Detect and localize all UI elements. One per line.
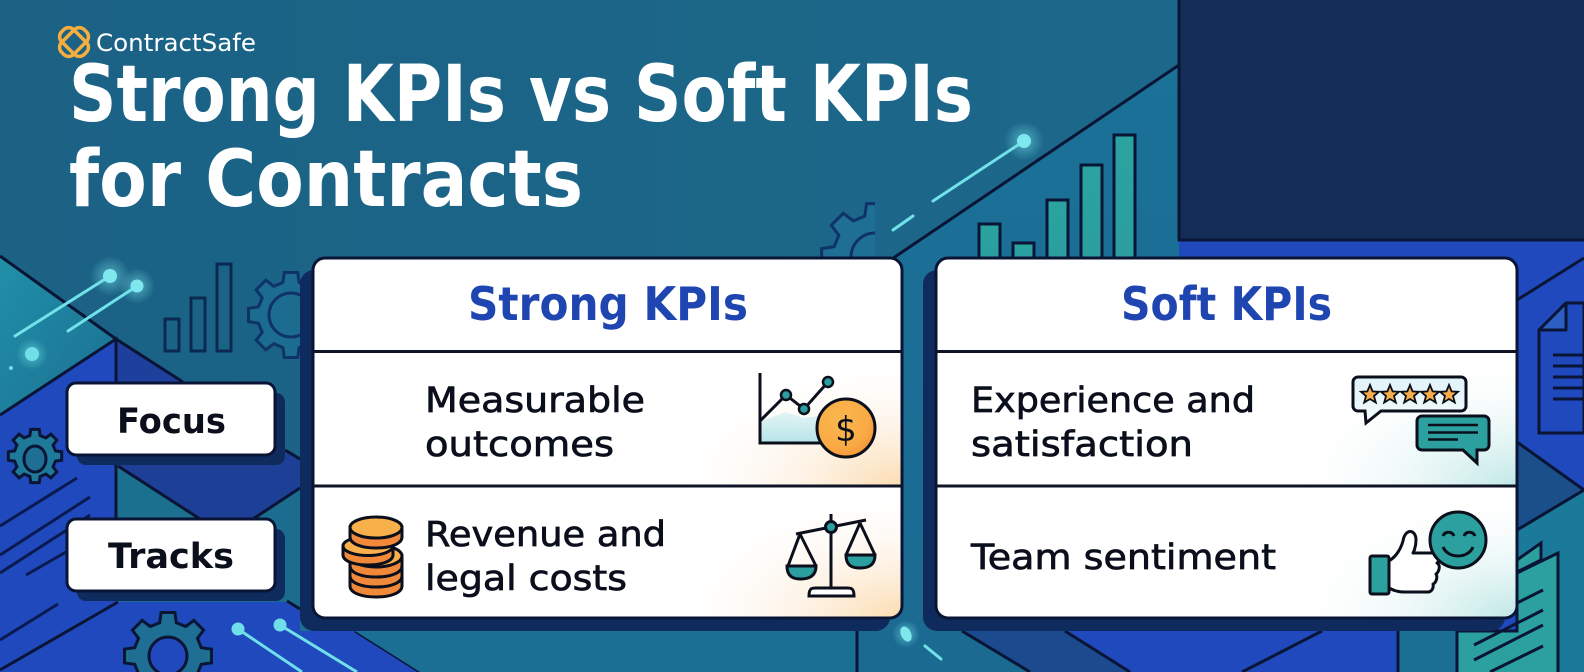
decoration: circuit lines left [0, 478, 90, 640]
row label: Focus: Focus [117, 402, 226, 442]
decoration: gear bottom [125, 613, 211, 672]
logo: ContractSafe: ContractSafe [96, 29, 256, 57]
bar chart: teal rising bars [979, 135, 1135, 260]
decoration: glowing lines left [9, 256, 155, 370]
text: Experience and satisfaction: satisfaction [971, 425, 1193, 465]
text: Measurable outcomes [425, 381, 645, 465]
heading: Soft KPIs: Soft KPIs [1121, 277, 1332, 331]
icon: chart with dollar coin [760, 373, 875, 457]
decoration: glowing line centre [893, 121, 1044, 230]
text: Revenue and legal costs [425, 515, 666, 599]
title [69, 50, 973, 225]
title: for Contracts [69, 135, 583, 225]
heading: Strong KPIs: Strong KPIs [468, 277, 748, 331]
decoration: document top right [1539, 303, 1584, 433]
decoration: outlined bar chart left [165, 264, 231, 351]
panel: Strong KPIs [300, 258, 902, 631]
title: Strong KPIs vs Soft KPIs [69, 50, 973, 140]
decoration: bottom nodes [232, 618, 357, 672]
icon: balance scales [787, 514, 875, 596]
icon: rating and comment bubbles [1353, 377, 1489, 463]
text: Measurable outcomes: Measurable [425, 381, 645, 421]
text: Measurable outcomes: outcomes [425, 425, 614, 465]
text: Revenue and legal costs: legal costs [425, 559, 627, 599]
panel: Soft KPIs [923, 258, 1517, 631]
decoration: bottom dash [892, 620, 941, 659]
row label: Focus [67, 383, 285, 465]
decoration: middle gear [820, 202, 875, 256]
row label: Tracks: Tracks [108, 537, 234, 577]
row label: Tracks [67, 519, 285, 601]
text: Revenue and legal costs: Revenue and [425, 515, 666, 555]
decoration: gear by left card [249, 273, 333, 357]
text: Team sentiment: Team sentiment [970, 538, 1276, 578]
icon: coin stack [343, 517, 402, 597]
text: Experience and satisfaction [971, 381, 1255, 465]
decoration: document bottom right [1457, 543, 1558, 672]
text: Experience and satisfaction: Experience and [971, 381, 1255, 421]
icon: thumbs up and smiley [1370, 512, 1486, 594]
decoration: gear left column [8, 429, 62, 483]
icon: chart with dollar coin: $ [835, 410, 857, 450]
logo: ContractSafe [57, 25, 256, 59]
